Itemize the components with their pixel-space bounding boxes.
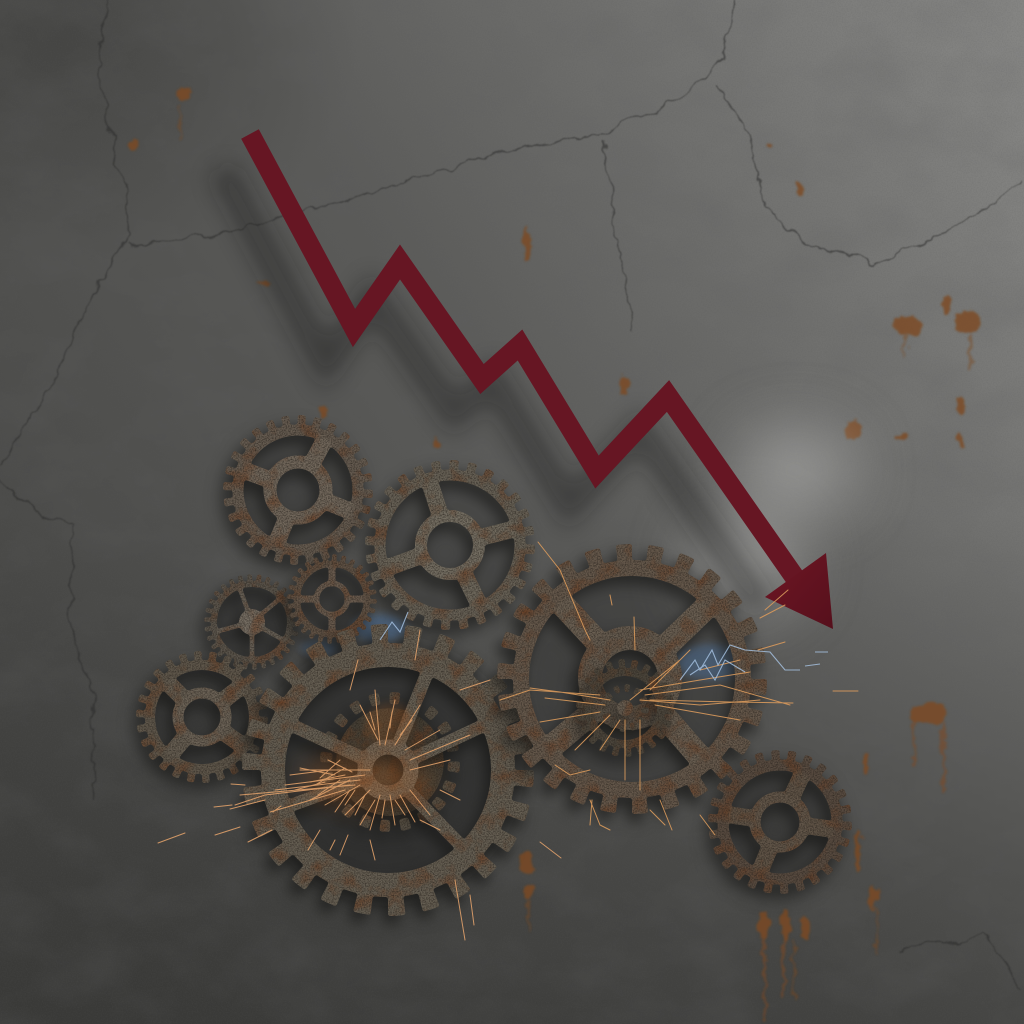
rust: bottom drips [519, 850, 810, 1020]
falling trend arrow [250, 134, 833, 629]
dark shadow pools behind the gears [148, 428, 836, 895]
rust: right wall patches [845, 295, 981, 447]
gear: inner small gear behind large gear [326, 698, 454, 826]
gear: small left with central boss [208, 578, 296, 666]
rust: lower right drips [855, 704, 948, 955]
rust: upper centre specks [523, 142, 806, 396]
rust: upper left specks [130, 85, 439, 445]
gear: inner small gear on right hub [581, 664, 669, 752]
smoke near the arrow head [690, 428, 853, 613]
arrow shadow [222, 170, 762, 607]
orange glow at sparks [300, 703, 430, 806]
gear: lower right [713, 755, 847, 889]
rust stains [130, 85, 981, 1020]
gear: top left [228, 420, 368, 560]
gear: top right [370, 465, 530, 625]
sparks: large gear burst [158, 630, 561, 940]
blue electric haze [300, 614, 748, 680]
gear: far left [141, 656, 263, 778]
gear: large lower [254, 636, 522, 904]
blue electric arcs [380, 612, 828, 680]
gear: large right [507, 554, 757, 804]
sparks: right gear burst [500, 542, 858, 835]
gear: small centre [291, 558, 373, 640]
